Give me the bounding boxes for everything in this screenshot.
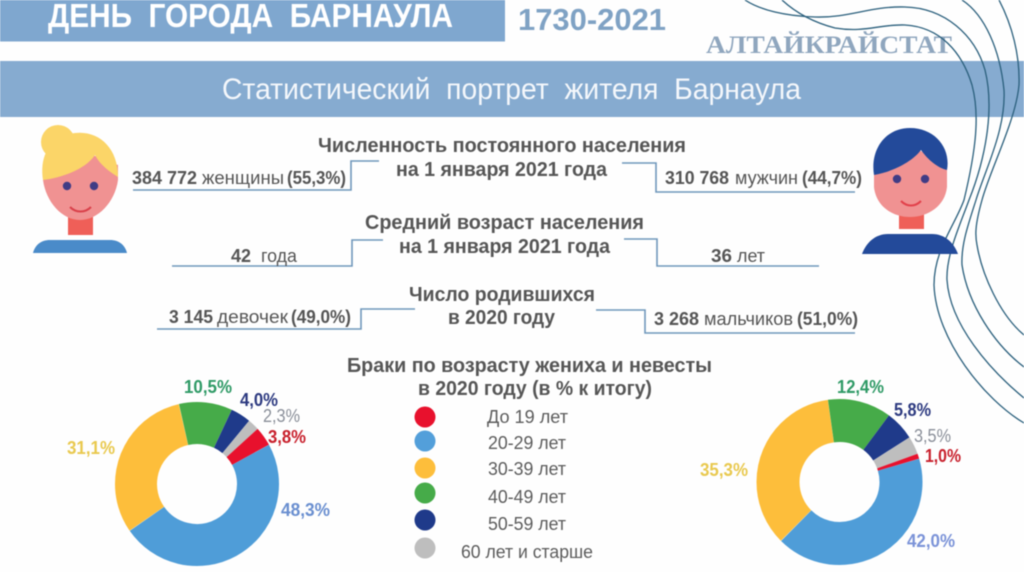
donut labels: right: 35,3% xyxy=(700,460,748,480)
value: boys born: 3 268 xyxy=(654,309,699,329)
legend: age groups xyxy=(414,406,593,562)
value: women: (55,3%) xyxy=(287,168,346,188)
donut labels: left: 4,0% xyxy=(240,390,278,410)
value: girls born: девочек xyxy=(217,307,288,327)
value: men: мужчин xyxy=(735,168,798,188)
value: men: 310 768 xyxy=(665,168,729,188)
heading: births: в 2020 году xyxy=(448,307,556,329)
donut labels: right: 3,5% xyxy=(914,426,951,446)
heading: marriages: в 2020 году (в % к итогу) xyxy=(418,378,652,400)
donut labels: right xyxy=(700,377,961,551)
heading: average age: Средний возраст населения xyxy=(365,212,644,234)
heading: marriages xyxy=(347,355,712,400)
icon: woman xyxy=(33,125,127,253)
donut labels: left xyxy=(67,377,330,520)
heading: marriages: Браки по возрасту жениха и невесты xyxy=(347,355,712,377)
value: female age: 42 xyxy=(231,246,251,266)
value: male age: лет xyxy=(737,246,765,266)
donut labels: left: 2,3% xyxy=(263,406,300,426)
donut labels: right: 1,0% xyxy=(925,446,961,466)
heading: average age: на 1 января 2021 года xyxy=(399,236,611,258)
value: girls born xyxy=(157,307,415,329)
value: boys born: (51,0%) xyxy=(797,309,858,329)
heading: population xyxy=(318,135,686,181)
heading: births xyxy=(409,284,595,329)
donut labels: left: 48,3% xyxy=(281,500,330,520)
value: boys born xyxy=(596,309,858,333)
heading: births: Число родившихся xyxy=(409,284,595,306)
organisation name: Altaikraistat: АЛТАЙКРАЙСТАТ xyxy=(706,31,952,59)
donut labels: right: 12,4% xyxy=(837,377,884,397)
decorative wave lines xyxy=(745,0,1024,423)
value: boys born: мальчиков xyxy=(704,309,793,329)
value: male age xyxy=(624,239,819,266)
heading: population: на 1 января 2021 года xyxy=(396,159,608,181)
donut labels: left: 3,8% xyxy=(268,427,306,447)
subtitle band: Статистический портрет жителя Барнаула xyxy=(222,73,801,106)
donut labels: left: 10,5% xyxy=(184,377,232,397)
donut chart: left xyxy=(111,398,283,570)
value: girls born: (49,0%) xyxy=(291,307,351,327)
legend: age groups: До 19 лет xyxy=(487,407,568,427)
value: male age: 36 xyxy=(711,246,732,266)
heading: population: Численность постоянного населения xyxy=(318,135,686,157)
years heading: 1730-2021 xyxy=(518,2,666,37)
value: men: (44,7%) xyxy=(802,168,862,188)
donut labels: right: 42,0% xyxy=(907,531,955,551)
value: women: женщины xyxy=(202,168,284,188)
value: women xyxy=(132,161,379,190)
legend: age groups: 60 лет и старше xyxy=(461,542,593,562)
donut labels: left: 31,1% xyxy=(67,438,115,458)
value: girls born: 3 145 xyxy=(169,307,213,327)
legend: age groups: 40-49 лет xyxy=(488,487,566,507)
legend: age groups: 20-29 лет xyxy=(488,433,566,453)
donut chart: right xyxy=(753,395,926,569)
subtitle band xyxy=(0,61,1024,117)
value: women: 384 772 xyxy=(132,168,197,188)
value: female age: года xyxy=(261,246,298,266)
icon: man xyxy=(862,128,958,254)
value: men xyxy=(622,163,862,192)
heading: average age xyxy=(365,212,644,258)
legend: age groups: 30-39 лет xyxy=(488,459,566,479)
legend: age groups: 50-59 лет xyxy=(488,514,566,534)
donut labels: right: 5,8% xyxy=(894,400,931,420)
value: female age xyxy=(172,240,383,266)
